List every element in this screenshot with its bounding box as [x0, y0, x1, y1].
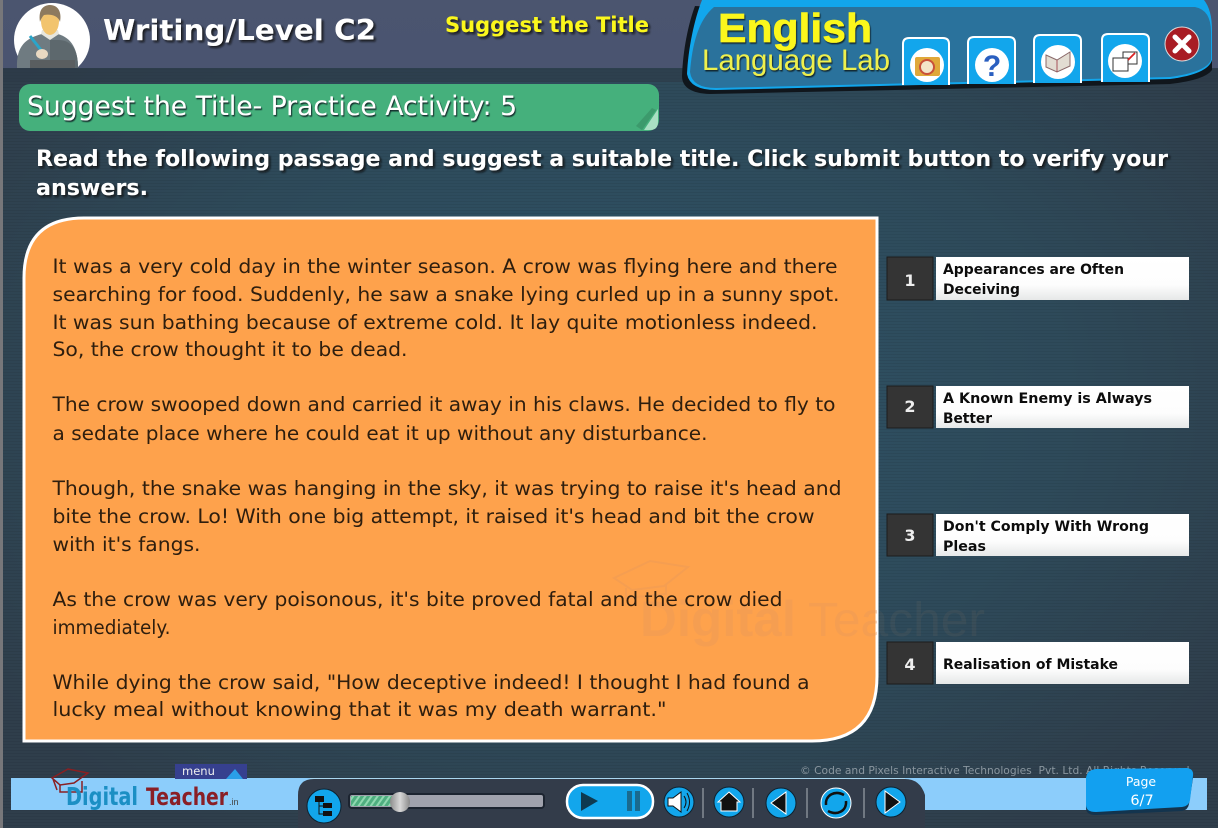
passage text: Though, the snake was hanging in the sky, it was trying to raise it's head and	[51, 477, 842, 500]
icon: close button	[1165, 27, 1199, 61]
panel: English Language Lab toolbar	[682, 0, 1212, 94]
passage text	[51, 255, 842, 721]
passage text: with it's fangs.	[52, 533, 200, 556]
footer light blue band	[11, 778, 1207, 810]
option 1	[887, 257, 1189, 300]
icon: book tab	[1034, 35, 1081, 83]
title: English: English	[718, 5, 872, 51]
passage text: searching for food. Suddenly, he saw a snake lying curled up in a sunny spot.	[52, 283, 840, 306]
passage text: immediately.	[52, 616, 170, 639]
passage text: The crow swooped down and carried it away in his claws. He decided to fly to	[51, 393, 836, 416]
logo: Digital Teacher	[52, 769, 239, 811]
icon: help tab	[968, 37, 1015, 84]
title: Language Lab: Language Lab	[702, 44, 890, 77]
menu tab: menu	[182, 764, 215, 778]
play and pause control	[567, 785, 653, 818]
icon: volume	[664, 787, 694, 817]
option 2	[887, 386, 1189, 428]
option 1: 1	[904, 271, 916, 290]
icon: folder clock tab	[903, 38, 949, 85]
heading: Suggest the Title- Practice Activity: 5: Suggest the Title- Practice Activity: 5	[27, 91, 517, 122]
logo: Digital Teacher: .in	[229, 797, 239, 807]
icon: menu tree button	[307, 789, 341, 823]
option 2: 2	[904, 397, 916, 416]
page indicator: 6/7	[1130, 793, 1154, 809]
option 3: 3	[904, 526, 916, 545]
option 1: Appearances are Often	[943, 261, 1124, 278]
logo: Digital Teacher: Digital	[66, 782, 138, 811]
page indicator	[1086, 768, 1193, 815]
instruction text: answers.	[36, 176, 148, 201]
option 3	[887, 514, 1189, 556]
instruction text	[36, 147, 1168, 201]
panel: activity title banner	[19, 84, 659, 131]
passage text: So, the crow thought it to be dead.	[52, 338, 408, 361]
copyright: © Code and Pixels Interactive Technologies Pvt. Ltd. All Rights Reserved.	[800, 765, 1193, 777]
watermark: Digital Teacher: Teacher	[808, 594, 985, 647]
watermark: Digital Teacher: Teacher	[808, 594, 985, 647]
player control bar	[298, 778, 925, 828]
passage text: a sedate place where he could eat it up without any disturbance.	[52, 422, 708, 445]
progress bar	[349, 792, 544, 812]
icon: previous	[766, 788, 796, 818]
option 4	[887, 642, 1189, 684]
passage text: It was a very cold day in the winter season. A crow was flying here and there	[52, 255, 837, 278]
option 2: Better	[943, 410, 993, 427]
passage text: lucky meal without knowing that it was my death warrant."	[52, 698, 666, 721]
option 1: Deceiving	[943, 281, 1020, 298]
option 2: A Known Enemy is Always	[943, 390, 1152, 407]
page indicator: Page	[1126, 774, 1156, 789]
logo: Digital Teacher: Teacher	[146, 783, 228, 811]
icon: windows tab	[1102, 34, 1149, 82]
icon: reload	[821, 788, 851, 818]
passage text: bite the crow. Lo! With one big attempt, it raised it's head and bit the crow	[52, 505, 814, 528]
option 3: Pleas	[943, 538, 986, 555]
heading: Writing/Level C2: Writing/Level C2	[103, 14, 376, 47]
option 3: Don't Comply With Wrong	[943, 518, 1149, 535]
passage text: As the crow was very poisonous, it's bite proved fatal and the crow died	[52, 588, 783, 611]
option 4: Realisation of Mistake	[943, 656, 1118, 673]
heading: Suggest the Title: Suggest the Title	[445, 13, 649, 37]
option 4: 4	[904, 655, 916, 674]
icon: home	[714, 787, 744, 817]
passage text: It was sun bathing because of extreme cold. It lay quite motionless indeed.	[52, 311, 818, 334]
panel: orange passage	[24, 218, 985, 741]
menu tab	[175, 764, 247, 779]
icon: next	[876, 787, 906, 817]
watermark: Digital Teacher	[614, 561, 985, 647]
icon: student writing avatar	[14, 3, 90, 68]
instruction text: Read the following passage and suggest a suitable title. Click submit button to verify your	[36, 147, 1168, 172]
passage text: While dying the crow said, "How deceptive indeed! I thought I had found a	[52, 671, 810, 694]
header bar	[3, 0, 1218, 68]
icon: help tab: ?	[983, 50, 1001, 83]
watermark: Digital Teacher: Digital	[640, 591, 796, 647]
